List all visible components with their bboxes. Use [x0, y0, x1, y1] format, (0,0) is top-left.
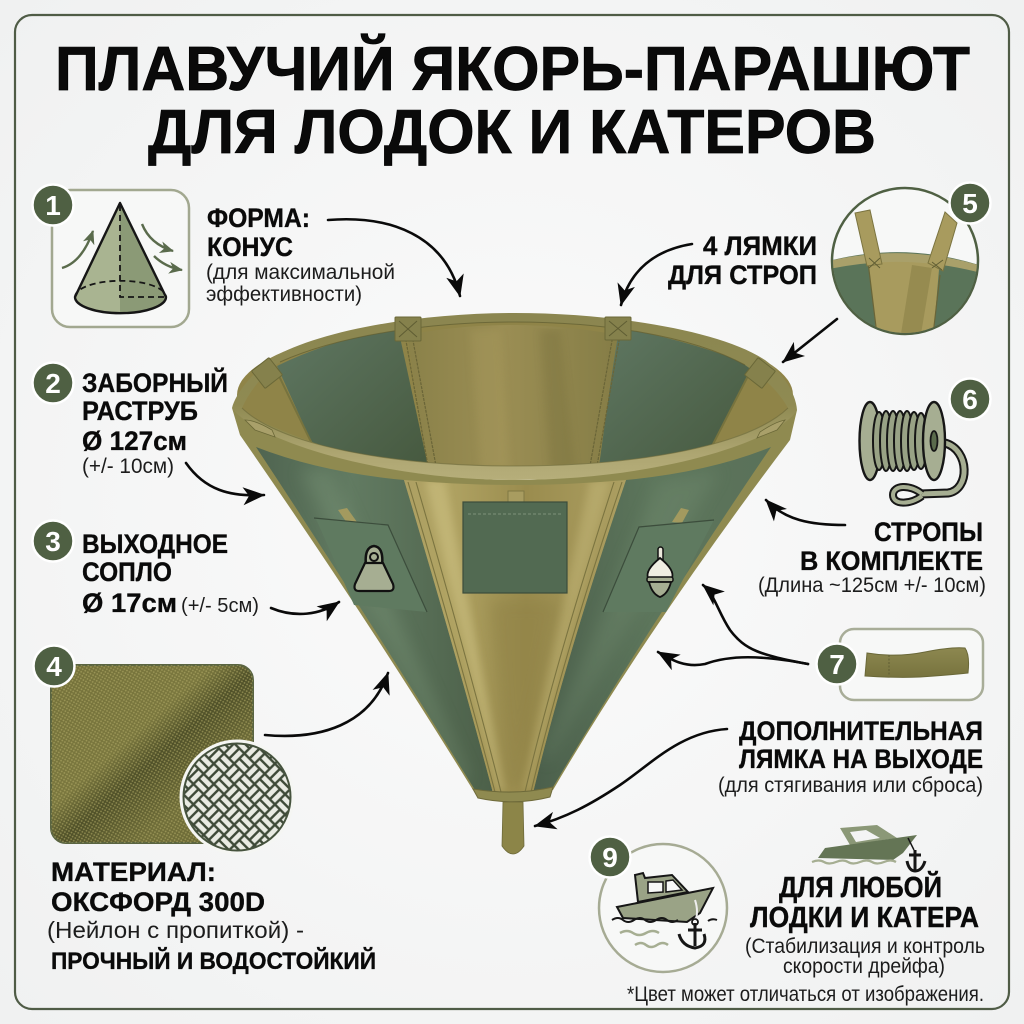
panel 2: inlet: Ø 127см [82, 426, 187, 456]
badge 6: 6 [962, 384, 978, 415]
text: form: ФОРМА: [207, 203, 310, 233]
panel 6: lines: В КОМПЛЕКТЕ [800, 546, 983, 576]
arrows: loop to pockets [658, 585, 808, 665]
detail circle [825, 188, 985, 340]
rim band [232, 313, 797, 480]
title: ПЛАВУЧИЙ ЯКОРЬ-ПАРАШЮТ [55, 34, 970, 104]
badge 6 [950, 378, 990, 420]
panel 3: outlet: СОПЛО [82, 557, 172, 587]
panel 2: inlet: ЗАБОРНЫЙ [82, 367, 228, 398]
badge 1 [32, 184, 74, 226]
panel 2: inlet: РАСТРУБ [82, 396, 198, 426]
flow arrows [62, 224, 182, 270]
icon box [52, 190, 189, 327]
panel 3: outlet: Ø 17см [82, 588, 177, 618]
panel 6: lines [758, 378, 990, 597]
arrow: outlet [271, 602, 339, 614]
title: ДЛЯ ЛОДОК И КАТЕРОВ [148, 98, 876, 167]
strap tabs on the rim [252, 317, 775, 388]
panel 2: inlet: (+/- 10см) [82, 455, 174, 478]
text: form: КОНУС [207, 232, 293, 262]
icon circle [599, 844, 727, 972]
icon: cone [75, 203, 166, 313]
arrow: straps to tabs [621, 244, 692, 305]
badge 5: 5 [962, 188, 978, 219]
centre pocket [463, 491, 567, 593]
badge 3: 3 [45, 526, 61, 557]
text: any boat [745, 870, 985, 978]
text: material: ПРОЧНЫЙ И ВОДОСТОЙКИЙ [51, 947, 376, 975]
badge 5 [950, 182, 990, 224]
text: straps: ДЛЯ СТРОП [668, 260, 817, 290]
text: material [47, 857, 376, 975]
icon: boat silhouette [812, 825, 925, 871]
text: any boat: (Стабилизация и контроль [745, 935, 985, 958]
panel 3: outlet: ВЫХОДНОЕ [82, 529, 228, 559]
text: any boat: скорости дрейфа) [783, 955, 945, 978]
arrow: detail to tab [783, 319, 837, 362]
text: material: МАТЕРИАЛ: [51, 857, 216, 887]
fabric swatch [51, 665, 253, 843]
arrow: lines [766, 500, 845, 525]
text: any boat: ДЛЯ ЛЮБОЙ [779, 870, 942, 904]
icon: boat with anchor [612, 873, 717, 948]
outlet strap [502, 802, 524, 854]
footnote: *Цвет может отличаться от изображения. [627, 983, 984, 1006]
arrow: form to cone [328, 219, 460, 296]
badge 2 [32, 362, 74, 404]
text: form: (для максимальной [206, 261, 395, 284]
text: extra strap [718, 716, 983, 797]
badge 7 [816, 644, 858, 684]
icon box [840, 629, 983, 700]
badge 4: 4 [46, 651, 62, 682]
title [55, 34, 970, 167]
panel 7: outlet loop [816, 629, 983, 700]
panel 1: cone shape [32, 184, 189, 327]
panel 6: lines: (Длина ~125см +/- 10см) [758, 574, 986, 597]
text: material: ОКСФОРД 300D [51, 887, 265, 917]
icon: strap loop [865, 648, 969, 677]
left pocket [314, 508, 427, 612]
cone interior [237, 317, 793, 473]
icon: float [647, 547, 673, 597]
badge 3 [32, 520, 74, 562]
panel 3: outlet [32, 520, 259, 618]
panel 6: lines: СТРОПЫ [874, 517, 983, 547]
text: straps [668, 231, 817, 290]
text: form [206, 203, 395, 306]
main product: cone sea anchor [232, 313, 797, 854]
side loops [245, 420, 785, 438]
icon: rope spool [860, 402, 964, 503]
panel 5: strap detail [825, 182, 990, 340]
badge 9: 9 [602, 842, 618, 873]
badge 7: 7 [829, 649, 845, 680]
front left green panel [256, 447, 493, 793]
panel 2: inlet [32, 362, 228, 478]
panel 3: outlet: (+/- 5см) [181, 595, 259, 617]
text: straps: 4 ЛЯМКИ [703, 231, 817, 261]
badge 4 [34, 646, 74, 686]
right pocket [603, 508, 714, 612]
cone front outer shell [232, 408, 797, 790]
arrow: extra strap [535, 729, 727, 826]
badge 2: 2 [45, 368, 61, 399]
panel 4: material [34, 646, 293, 853]
text: extra strap: ДОПОЛНИТЕЛЬНАЯ [739, 716, 983, 746]
text: form: эффективности) [206, 283, 362, 306]
weave magnifier [183, 743, 291, 851]
text: extra strap: ЛЯМКА НА ВЫХОДЕ [739, 744, 983, 774]
badge 1: 1 [45, 190, 61, 221]
front centre khaki panel [404, 480, 626, 793]
text: any boat: ЛОДКИ И КАТЕРА [750, 902, 979, 934]
icon: weight [354, 546, 394, 591]
outlet nozzle collar [473, 787, 553, 802]
arrow: material [265, 673, 388, 736]
arrow: inlet [186, 463, 264, 495]
text: material: (Нейлон с пропиткой) - [47, 917, 304, 943]
front right green panel [533, 447, 771, 793]
panel 9: any boat [590, 836, 727, 972]
text: extra strap: (для стягивания или сброса) [718, 774, 983, 797]
